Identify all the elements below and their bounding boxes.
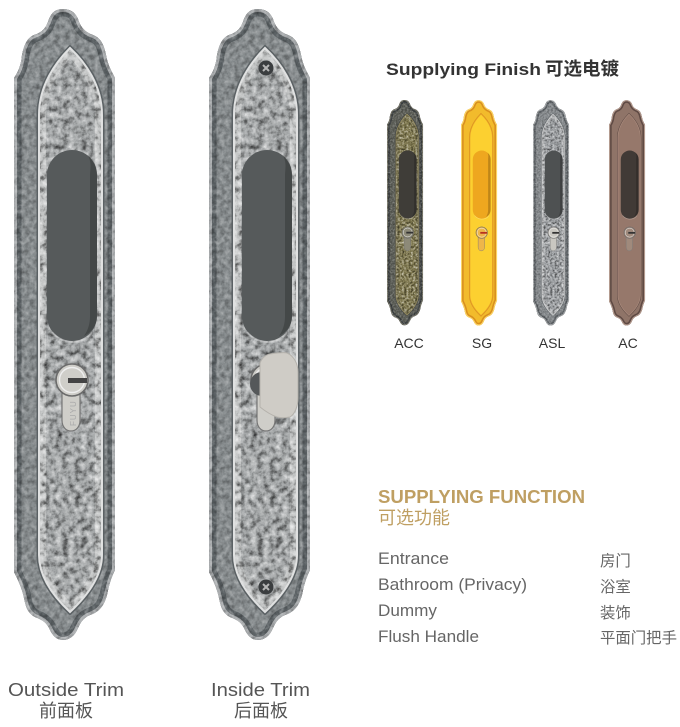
function list: Entrance: [378, 550, 449, 568]
top screw: [258, 60, 274, 76]
lock cylinder: [56, 364, 88, 431]
lock cylinder: FUYU: [69, 400, 78, 426]
function list: 浴室: [600, 578, 631, 596]
heading: supplying finish: 可选电镀: [545, 58, 619, 79]
bottom screw: [258, 580, 274, 594]
heading: supplying finish: [386, 58, 619, 79]
label: inside trim: 后面板: [234, 701, 288, 721]
heading: supplying function: 可选功能: [378, 508, 450, 528]
finish sample: ASL: ASL: [539, 335, 565, 351]
function list: Dummy: [378, 602, 438, 620]
function list: Bathroom (Privacy): [378, 576, 527, 594]
plate: outside trim: [14, 9, 115, 640]
function list: 房门: [600, 552, 631, 570]
finish sample: AC: [609, 100, 645, 351]
function list: 装饰: [600, 604, 631, 622]
plate: inside trim: [209, 9, 310, 640]
label: outside trim: [8, 679, 124, 721]
function list: 平面门把手: [600, 629, 677, 647]
function list: Flush Handle: [378, 628, 479, 646]
finish sample: AC: AC: [618, 335, 638, 351]
finish sample: SG: SG: [472, 335, 492, 351]
label: outside trim: Outside Trim: [8, 679, 124, 700]
finish sample: ACC: ACC: [394, 335, 424, 351]
label: inside trim: [211, 679, 310, 721]
finish sample: ASL: [533, 100, 569, 351]
thumb turn: [250, 353, 298, 431]
heading: supplying finish: Supplying Finish: [386, 61, 541, 79]
heading: supplying function: [378, 487, 585, 528]
label: outside trim: 前面板: [39, 701, 93, 721]
finish sample: SG: [461, 100, 497, 351]
heading: supplying function: SUPPLYING FUNCTION: [378, 487, 585, 507]
label: inside trim: Inside Trim: [211, 679, 310, 700]
function list: [378, 550, 677, 647]
finish sample: ACC: [387, 100, 424, 351]
